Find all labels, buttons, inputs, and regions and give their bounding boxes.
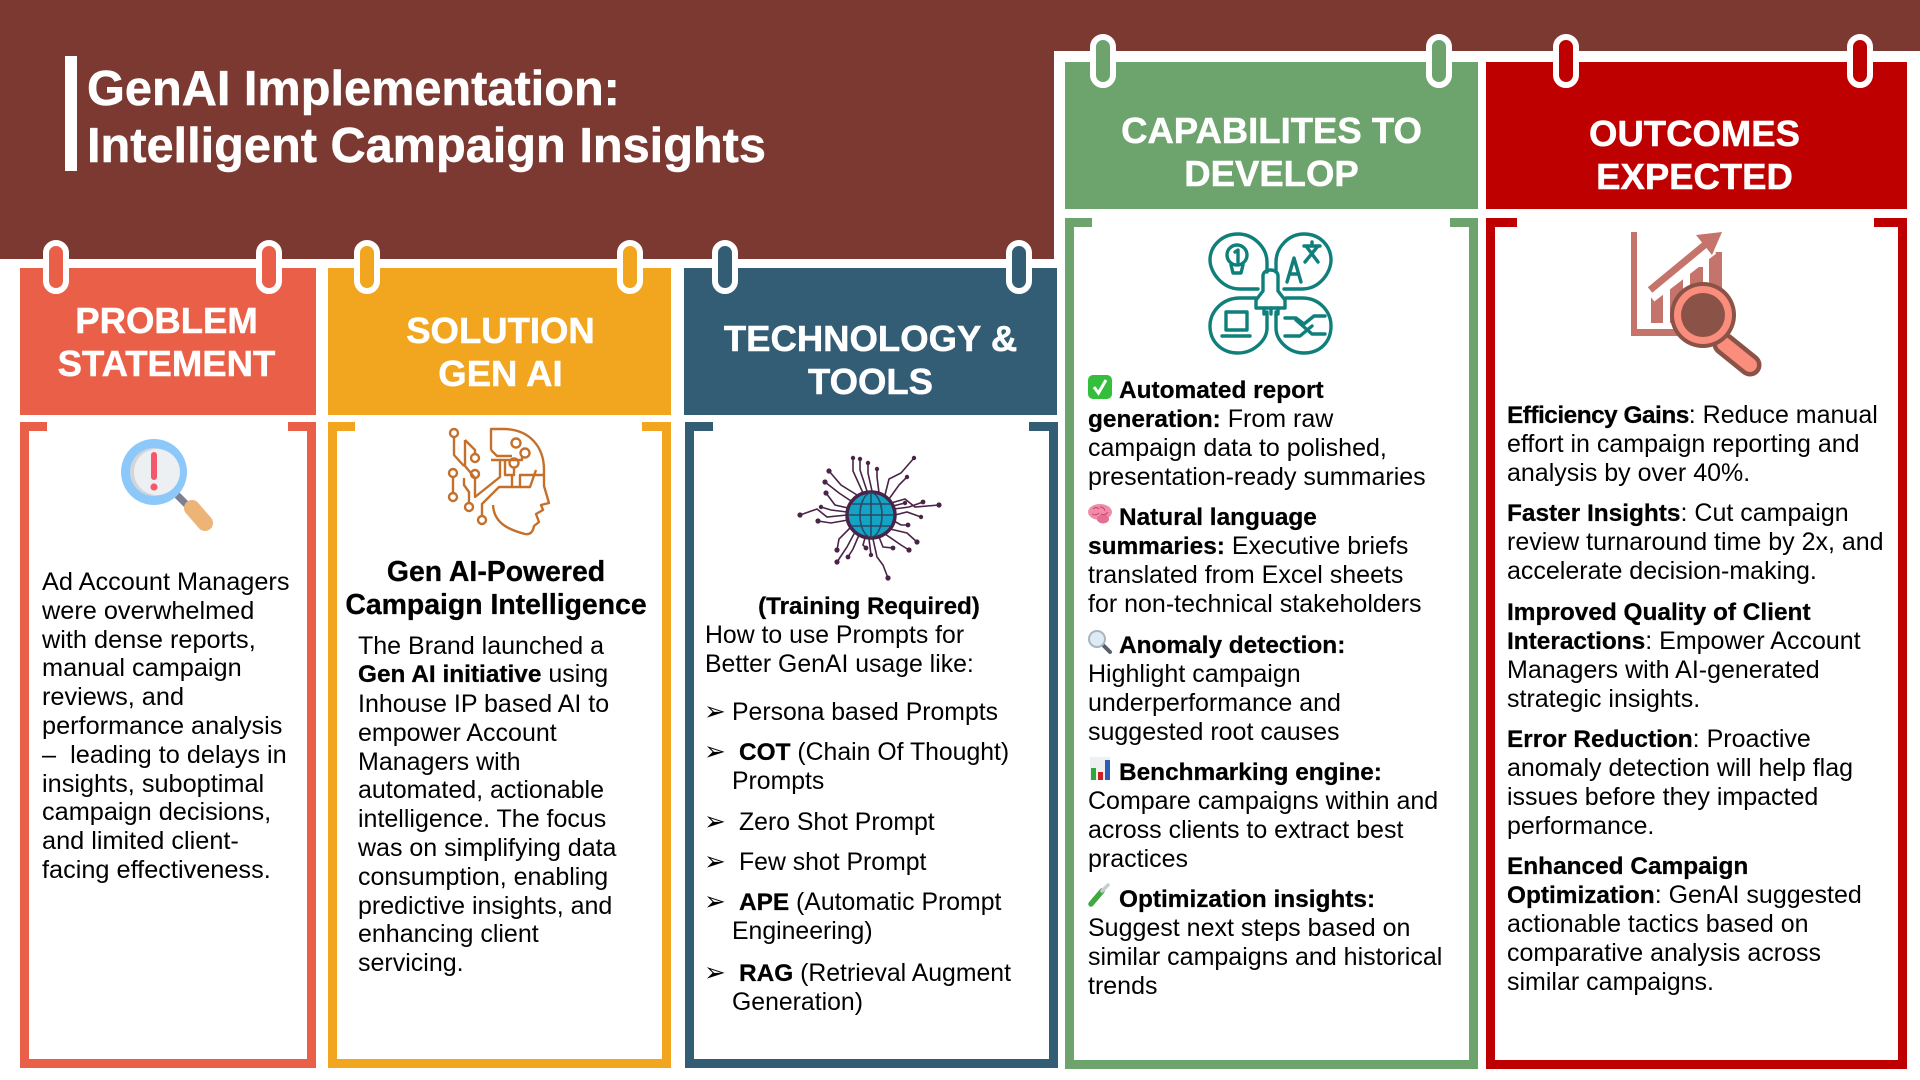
capability: anomaly detection: suggested root causes xyxy=(1088,718,1340,746)
text: solution description: The Brand launched a xyxy=(358,632,604,660)
outcome: faster insights: review turnaround time by 2x, and xyxy=(1507,528,1884,556)
text: solution description: consumption, enabling xyxy=(358,863,608,891)
header: technology and tools: TOOLS xyxy=(808,361,933,402)
panel: solution gen ai xyxy=(328,240,671,1068)
panel: problem statement xyxy=(20,240,316,1068)
capability: natural language summaries: Natural language xyxy=(1119,504,1317,531)
text: solution description: Managers with xyxy=(358,748,521,776)
capability: anomaly detection: Anomaly detection: xyxy=(1119,632,1345,659)
outcome: efficiency gains: analysis by over 40%. xyxy=(1507,459,1750,487)
text: problem description: facing effectiveness. xyxy=(42,856,271,884)
capability: natural language summaries: for non-technical stakeholders xyxy=(1088,590,1422,618)
text: how to use prompts: Better GenAI usage like: xyxy=(705,651,974,678)
header: technology and tools: TECHNOLOGY & xyxy=(724,318,1017,359)
header: problem statement: STATEMENT xyxy=(58,343,275,384)
header: problem statement xyxy=(20,268,316,415)
outcome: improved quality of client interactions: strategic insights. xyxy=(1507,685,1700,713)
text: problem description: were overwhelmed xyxy=(42,597,254,625)
outcome: improved quality of client interactions: Managers with AI-generated xyxy=(1507,656,1820,684)
capability: automated report generation: campaign data to polished, xyxy=(1088,434,1387,462)
capability: automated report generation: presentation-ready summaries xyxy=(1088,463,1426,491)
capability: natural language summaries: translated from Excel sheets xyxy=(1088,561,1403,589)
icon: ai head xyxy=(448,428,550,536)
text: solution description xyxy=(358,632,616,977)
capability: automated report generation: generation: From raw xyxy=(1088,405,1333,433)
outcome: error reduction: performance. xyxy=(1507,812,1654,840)
panel: technology and tools xyxy=(684,240,1058,1068)
capability: benchmarking engine: Benchmarking engine: xyxy=(1119,759,1382,786)
outcome: faster insights: Faster Insights: Cut campaign xyxy=(1507,499,1849,527)
text: problem description: and limited client- xyxy=(42,827,239,855)
text: problem description: with dense reports, xyxy=(42,626,256,654)
text: problem description: Ad Account Managers xyxy=(42,568,290,596)
text: how to use prompts xyxy=(705,622,974,678)
capability: benchmarking engine: Compare campaigns within and xyxy=(1088,787,1438,815)
header: solution gen ai xyxy=(328,268,671,415)
outcome: enhanced campaign optimization: similar campaigns. xyxy=(1507,968,1714,996)
capability: anomaly detection xyxy=(1088,630,1345,746)
outcome: faster insights xyxy=(1507,499,1884,585)
text: solution description: intelligence. The focus xyxy=(358,805,606,833)
text: solution description: empower Account xyxy=(358,719,557,747)
header: outcomes expected: EXPECTED xyxy=(1596,156,1793,197)
list: prompt techniques: Prompts xyxy=(732,768,824,795)
header: capabilities to develop: CAPABILITES TO xyxy=(1121,110,1422,151)
outcome: enhanced campaign optimization: actionable tactics based on xyxy=(1507,910,1809,938)
text: problem description: – leading to delays in xyxy=(42,741,287,769)
header: capabilities to develop: DEVELOP xyxy=(1184,153,1359,194)
capability: optimization insights xyxy=(1088,883,1442,1000)
text: problem description: performance analysis xyxy=(42,712,282,740)
outcome: improved quality of client interactions: Improved Quality of Client xyxy=(1507,599,1811,626)
capability: optimization insights: similar campaigns and historical xyxy=(1088,943,1442,971)
text: problem description: reviews, and xyxy=(42,683,184,711)
capability: anomaly detection: Highlight campaign xyxy=(1088,660,1301,688)
list: prompt techniques: ➢ xyxy=(704,697,726,727)
capability: optimization insights: Suggest next steps based on xyxy=(1088,914,1410,942)
text: solution description: servicing. xyxy=(358,949,464,977)
outcome: efficiency gains xyxy=(1507,401,1878,487)
panel: capabilities to develop xyxy=(1065,34,1478,1069)
list: prompt techniques: ➢ xyxy=(704,887,726,917)
text: problem description: campaign decisions, xyxy=(42,798,271,826)
heading: training required: (Training Required) xyxy=(758,593,980,620)
header: technology and tools xyxy=(684,268,1057,415)
list: prompt techniques: Persona based Prompts xyxy=(732,699,998,726)
list: prompt techniques: Zero Shot Prompt xyxy=(739,809,935,836)
outcome: improved quality of client interactions: Interactions: Empower Account xyxy=(1507,627,1861,655)
text: solution description: predictive insights, and xyxy=(358,892,612,920)
list: prompt techniques: RAG (Retrieval Augment xyxy=(739,960,1011,987)
text: solution description: was on simplifying data xyxy=(358,834,616,862)
capability: natural language summaries: summaries: Executive briefs xyxy=(1088,532,1408,560)
text: problem description: insights, suboptimal xyxy=(42,770,264,798)
heading: gen ai-powered campaign intelligence: Gen AI-Powered xyxy=(387,556,605,588)
outcome: efficiency gains: Efficiency Gains: Reduce manual xyxy=(1507,401,1878,429)
text: problem description: manual campaign xyxy=(42,654,242,682)
text: solution description: enhancing client xyxy=(358,920,539,948)
title xyxy=(65,56,766,173)
panel: outcomes expected xyxy=(1486,34,1907,1069)
heading: gen ai-powered campaign intelligence xyxy=(345,556,647,621)
icon: magnifier with alert xyxy=(121,439,213,531)
header: outcomes expected: OUTCOMES xyxy=(1589,113,1800,154)
outcome: enhanced campaign optimization: comparative analysis across xyxy=(1507,938,1821,966)
outcome: enhanced campaign optimization xyxy=(1507,852,1862,996)
header: solution gen ai: GEN AI xyxy=(438,353,563,394)
list: prompt techniques: Few shot Prompt xyxy=(739,849,926,876)
capability: automated report generation xyxy=(1088,375,1426,491)
title: Intelligent Campaign Insights xyxy=(87,119,766,173)
text: solution description: automated, actionable xyxy=(358,776,604,804)
outcome: error reduction: anomaly detection will help flag xyxy=(1507,754,1853,782)
capability: benchmarking engine: across clients to extract best xyxy=(1088,816,1403,844)
icon: globe network xyxy=(797,456,942,581)
list: prompt techniques: ➢ xyxy=(704,847,726,877)
capability: automated report generation: Automated report xyxy=(1119,377,1324,404)
list: prompt techniques: Generation) xyxy=(732,989,863,1016)
list: prompt techniques: APE (Automatic Prompt xyxy=(739,889,1001,916)
text: solution description: Inhouse IP based AI to xyxy=(358,690,609,718)
capability: optimization insights: trends xyxy=(1088,972,1157,1000)
capability: benchmarking engine: practices xyxy=(1088,845,1188,873)
list: prompt techniques: ➢ xyxy=(704,737,726,767)
text: how to use prompts: How to use Prompts for xyxy=(705,622,964,649)
banner background xyxy=(0,0,1920,259)
outcome: error reduction: issues before they impacted xyxy=(1507,782,1818,810)
list: prompt techniques: ➢ xyxy=(704,807,726,837)
list: prompt techniques: Engineering) xyxy=(732,918,873,945)
outcome: faster insights: accelerate decision-making. xyxy=(1507,557,1817,585)
outcome: improved quality of client interactions xyxy=(1507,599,1861,713)
capability: anomaly detection: underperformance and xyxy=(1088,689,1341,717)
capability: optimization insights: Optimization insights: xyxy=(1119,886,1375,913)
heading: gen ai-powered campaign intelligence: Campaign Intelligence xyxy=(345,589,647,621)
text: solution description: Gen AI initiative using xyxy=(358,660,608,688)
outcome: error reduction: Error Reduction: Proactive xyxy=(1507,724,1811,752)
list: prompt techniques: COT (Chain Of Thought) xyxy=(739,739,1009,766)
header: solution gen ai: SOLUTION xyxy=(406,310,595,351)
capability: benchmarking engine xyxy=(1088,757,1438,873)
header: problem statement: PROBLEM xyxy=(75,300,258,341)
capability: natural language summaries xyxy=(1088,504,1422,618)
title: GenAI Implementation: xyxy=(87,62,620,116)
outcome: error reduction xyxy=(1507,724,1853,840)
text: problem description xyxy=(42,568,290,884)
list: prompt techniques: ➢ xyxy=(704,958,726,988)
header: capabilities to develop xyxy=(1065,62,1478,209)
list: prompt techniques xyxy=(704,697,1011,1016)
outcome: enhanced campaign optimization: Optimization: GenAI suggested xyxy=(1507,880,1862,908)
header: outcomes expected xyxy=(1486,62,1907,209)
icon: growth chart with magnifier xyxy=(1631,232,1762,376)
outcome: enhanced campaign optimization: Enhanced Campaign xyxy=(1507,852,1748,880)
icon: capability lobes xyxy=(1208,232,1333,355)
outcome: efficiency gains: effort in campaign reporting and xyxy=(1507,430,1860,458)
